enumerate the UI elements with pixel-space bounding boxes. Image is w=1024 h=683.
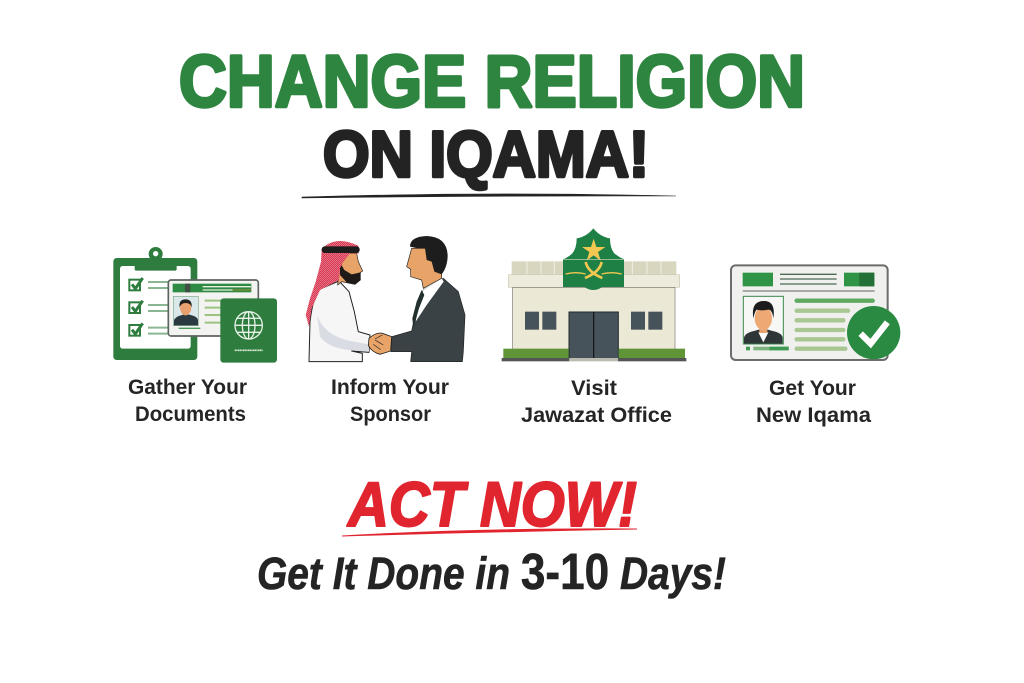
wall xyxy=(513,287,675,351)
label: Gather Your Documents xyxy=(128,376,247,426)
check badge xyxy=(847,306,900,359)
clipboard xyxy=(113,247,197,360)
title underline xyxy=(302,194,676,198)
title: On Iqama: ON IQAMA! xyxy=(323,118,649,190)
label: Inform Your Sponsor: Inform Your xyxy=(331,376,449,399)
label: Gather Your Documents: Documents xyxy=(135,403,246,426)
label: Visit Jawazat Office: Jawazat Office xyxy=(521,404,672,427)
icon: documents xyxy=(113,247,277,363)
text lines xyxy=(797,301,873,349)
icon: new iqama card xyxy=(731,265,900,360)
label: Get Your New Iqama: New Iqama xyxy=(756,404,871,427)
lawn xyxy=(503,349,569,358)
passport xyxy=(220,298,277,363)
door xyxy=(569,312,618,359)
icon: Jawazat office building xyxy=(502,228,686,361)
saudi man xyxy=(306,241,370,362)
icon: handshake xyxy=(306,236,465,362)
roof band xyxy=(508,275,680,287)
title: Change Religion: CHANGE RELIGION xyxy=(179,42,805,122)
label: Gather Your Documents: Gather Your xyxy=(128,376,247,399)
label: Visit Jawazat Office: Visit xyxy=(571,377,617,400)
windows xyxy=(525,312,662,330)
card xyxy=(731,265,888,360)
tagline: Get It Done in 3-10 Days! xyxy=(257,543,726,600)
ID card xyxy=(168,280,258,336)
heading: Act Now: ACT NOW! xyxy=(346,470,637,540)
act now underline xyxy=(342,529,637,536)
label: Get Your New Iqama xyxy=(756,377,871,427)
label: Inform Your Sponsor: Sponsor xyxy=(350,403,431,426)
hands xyxy=(368,333,392,354)
parapet xyxy=(512,261,676,275)
label: Visit Jawazat Office xyxy=(521,377,672,427)
emblem xyxy=(563,228,624,290)
label: Inform Your Sponsor xyxy=(331,376,449,426)
portrait xyxy=(743,296,789,350)
businessman xyxy=(391,236,465,362)
label: Get Your New Iqama: Get Your xyxy=(769,377,856,400)
